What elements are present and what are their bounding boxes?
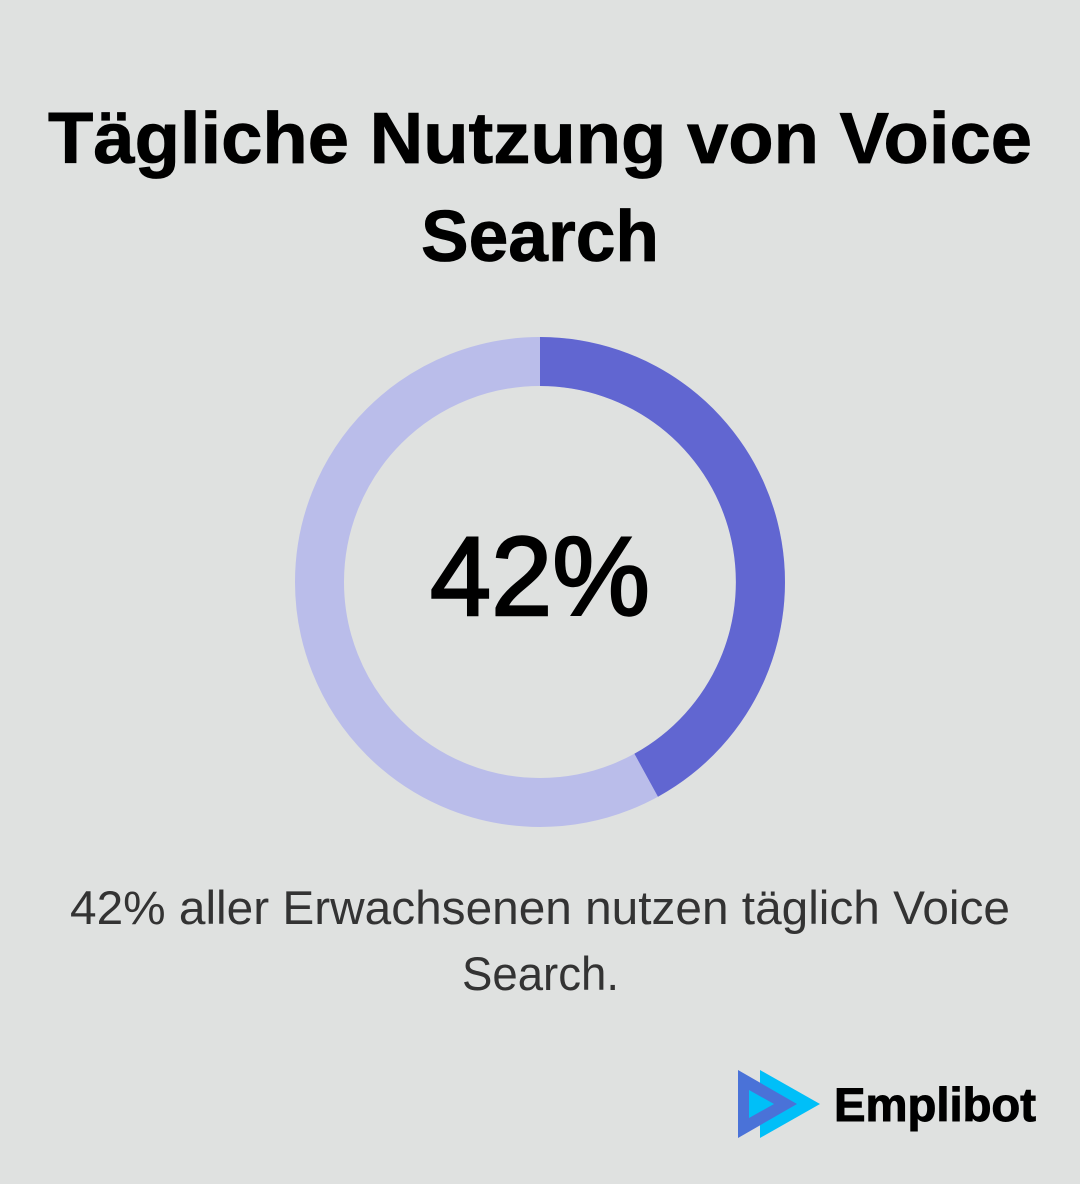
donut value segment [540, 337, 785, 797]
title: Tägliche Nutzung von Voice [48, 99, 1032, 179]
title [48, 99, 1032, 277]
logo: Emplibot [738, 1070, 1036, 1138]
logo wordmark: Emplibot [834, 1078, 1036, 1131]
title: Search [421, 197, 659, 277]
donut track [320, 362, 760, 802]
description text [70, 881, 1010, 1000]
center value: 42% [430, 514, 650, 639]
description text: 42% aller Erwachsenen nutzen täglich Voice [70, 881, 1010, 934]
icon: play triangles [738, 1070, 820, 1138]
description text: Search. [462, 947, 619, 1000]
donut chart: 42 percent [320, 337, 785, 802]
